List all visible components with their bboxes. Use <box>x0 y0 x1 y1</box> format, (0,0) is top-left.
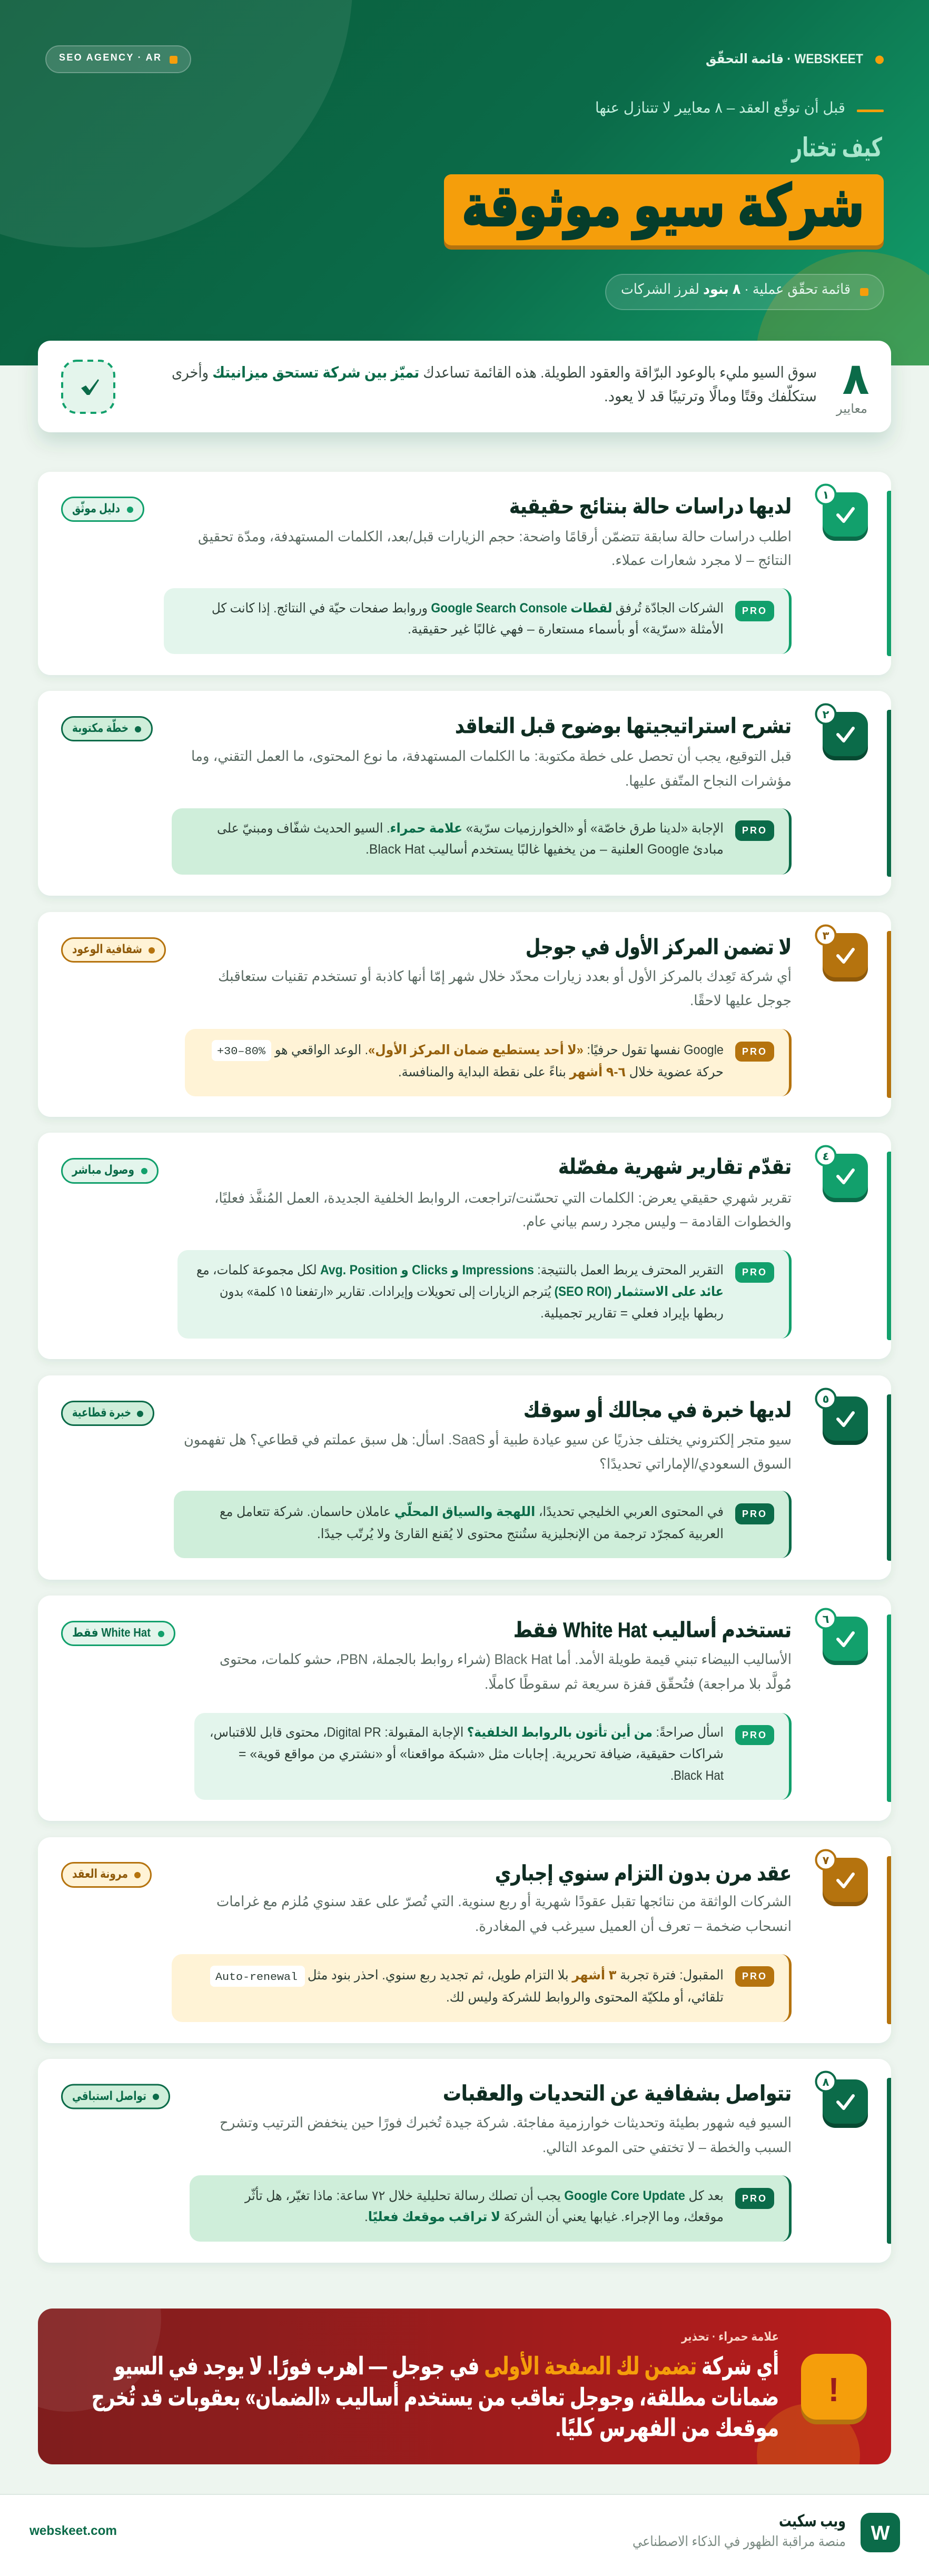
intro text: ستكلّفك وقتًا ومالًا وترتيبًا قد لا يعود. <box>604 385 817 405</box>
icon: check 1 <box>816 484 868 541</box>
warning banner <box>38 2309 891 2464</box>
callout: العربية كمجرّد ترجمة من الإنجليزية ستُنتج محتوى لا يُقنع القارئ ولا يُرتّب جيدًا. <box>317 1527 724 1542</box>
tag pill: تواصل استباقي <box>72 2089 146 2103</box>
icon: check 6: ٦ <box>823 1613 829 1626</box>
heading: تقدّم تقارير شهرية مفصّلة <box>558 1155 792 1179</box>
tag pill <box>62 1863 151 1887</box>
body text: قبل التوقيع، يجب أن تحصل على خطة مكتوبة: ما الكلمات المستهدفة، ما نوع المحتوى، ما العمل التقني، وما <box>191 746 792 765</box>
panel: criterion 8 <box>38 2059 891 2263</box>
body text: سيو متجر إلكتروني يختلف جذريًا عن سيو عيادة طبية أو SaaS. اسأل: هل سبق عملتم في قطاعي؟ هل تفهمون <box>184 1429 792 1448</box>
panel: criterion 2 <box>38 691 891 896</box>
icon: check 8: ٨ <box>823 2076 829 2088</box>
body text: والخطوات القادمة – وليس مجرد رسم بياني عام. <box>522 1214 792 1230</box>
heading line: كيف تختار <box>790 133 883 163</box>
icon: check 5 <box>816 1389 868 1445</box>
callout: عائد على الاستثمار (SEO ROI) يُترجم الزيارات إلى تحويلات وإيرادات. تقارير «ارتفعنا ١٥ كلمة» بدون <box>220 1284 724 1300</box>
intro text: سوق السيو مليء بالوعود البرّاقة والعقود الطويلة. هذه القائمة تساعدك تميّز بين شركة تستحق ميزانيتك وأخرى <box>172 362 817 382</box>
body text <box>184 1429 792 1472</box>
agency pill <box>46 46 191 73</box>
icon: check 3 <box>816 926 868 982</box>
body text: مؤشرات النجاح المتّفق عليها. <box>625 773 792 789</box>
body text: جوجل عليها لاحقًا. <box>690 993 792 1009</box>
icon: check 2 <box>816 705 868 760</box>
tag pill: خطّة مكتوبة <box>72 719 129 735</box>
body text: اطلب دراسات حالة سابقة تتضمّن أرقامًا واضحة: حجم الزيارات قبل/بعد، الكلمات المستهدفة، ومدّة تحقيق <box>198 527 792 545</box>
icon: check 5: ٥ <box>823 1393 829 1405</box>
warning text <box>92 2350 779 2442</box>
warning text: موقعك من الفهرس كليًا. <box>556 2414 779 2442</box>
callout: PRO <box>742 1046 767 1057</box>
icon: warning: ! <box>828 2371 839 2409</box>
stat: 8 criteria <box>836 354 869 416</box>
stat: 8 criteria: معايير <box>836 402 867 416</box>
tag pill: شفافية الوعود <box>72 942 142 956</box>
callout: PRO <box>742 606 767 616</box>
tagline: قبل أن توقّع العقد – ٨ معايير لا تتنازل عنها <box>595 97 845 116</box>
callout <box>172 1954 792 2022</box>
callout: بعد كل Google Core Update يجب أن تصلك رسالة تحليلية خلال ٧٢ ساعة: ماذا تغيّر، هل تأثّر <box>244 2186 724 2203</box>
tag pill: White Hat فقط <box>72 1626 151 1639</box>
heading: تستخدم أساليب White Hat فقط <box>513 1616 792 1642</box>
callout: PRO <box>742 825 767 836</box>
panel: criterion 6 <box>38 1596 891 1821</box>
callout <box>177 1250 792 1339</box>
icon: check 3: ٣ <box>823 930 829 942</box>
brand name: ويب سكيت <box>779 2511 846 2531</box>
panel: criterion 7 <box>38 1837 891 2043</box>
tag pill <box>62 2085 170 2108</box>
eyebrow: علامة حمراء · تحذير <box>681 2330 779 2344</box>
tag pill <box>62 1622 175 1645</box>
callout: PRO <box>742 1730 767 1740</box>
callout: الإجابة «لدينا طرق خاصّة» أو «الخوارزميات سرّية» علامة حمراء. السيو الحديث شفّاف ومبنيّ على <box>217 819 724 836</box>
body text <box>214 1188 792 1230</box>
subtitle pill: قائمة تحقّق عملية · ٨ بنود لفرز الشركات <box>621 281 851 298</box>
icon: check 8 <box>816 2072 868 2128</box>
callout: الشركات الجادّة تُرفق لقطات Google Search Console وروابط صفحات حيّة في النتائج. إذا كانت كل <box>212 601 724 616</box>
icon: check 7 <box>816 1850 868 1906</box>
body text: أي شركة تَعِدك بالمركز الأول أو بعدد زيارات محدّد خلال شهر إمّا أنها كاذبة أو تستخدم تقنيات ستعاقبك <box>218 966 792 985</box>
icon: check 4: ٤ <box>823 1151 829 1163</box>
callout: تلقائي، أو ملكيّة المحتوى والروابط للشركة وليس لك. <box>446 1988 724 2005</box>
heading: لديها خبرة في مجالك أو سوقك <box>523 1396 792 1422</box>
body text: السوق السعودي/الإماراتي تحديدًا؟ <box>599 1456 792 1472</box>
callout: PRO <box>742 1509 767 1519</box>
tag pill <box>62 1158 158 1183</box>
hero header <box>0 0 929 365</box>
heading: لديها دراسات حالة بنتائج حقيقية <box>509 495 792 519</box>
callout: حركة عضوية خلال ٦-٩ أشهر بناءً على نقطة البداية والمنافسة. <box>398 1063 724 1080</box>
body text <box>216 1891 792 1935</box>
tag pill: وصول مباشر <box>72 1163 134 1177</box>
body text: تقرير شهري حقيقي يعرض: الكلمات التي تحسّنت/تراجعت، الروابط الخلفية الجديدة، العمل المُنفَّذ فعليًا، <box>214 1188 792 1206</box>
panel: criterion 5 <box>38 1375 891 1580</box>
tag pill <box>62 497 143 521</box>
icon: warning <box>801 2354 867 2424</box>
body text: مُولَّد بلا مراجعة) فتُحقّق قفزة سريعة ثم سقوطًا كاملًا. <box>485 1671 792 1692</box>
agency pill: SEO AGENCY · AR <box>59 52 161 63</box>
footer <box>0 2494 929 2576</box>
callout: PRO <box>742 2193 767 2204</box>
body text: الشركات الواثقة من نتائجها تقبل عقودًا شهرية أو ربع سنوية. التي تُصرّ على عقد سنوي مُلزم مع غرامات <box>216 1891 792 1910</box>
tag pill <box>62 717 152 740</box>
body text <box>220 1649 792 1692</box>
icon: check 2: ٢ <box>823 709 829 721</box>
tag pill: دليل موثّق <box>72 501 120 516</box>
body text <box>198 527 792 569</box>
body text: النتائج – لا مجرد شعارات عملاء. <box>611 552 792 569</box>
intro card <box>38 341 891 432</box>
callout: مبادئ Google العلنية – من يخفيها غالبًا يستخدم أساليب Black Hat. <box>365 840 724 857</box>
logo <box>861 2513 900 2552</box>
callout <box>185 1029 792 1096</box>
callout <box>172 808 792 875</box>
callout: التقرير المحترف يربط العمل بالنتيجة: Impressions و Clicks و Avg. Position لكل مجموعة كلمات، مع <box>196 1263 724 1278</box>
panel: criterion 3 <box>38 912 891 1117</box>
callout <box>194 1713 792 1800</box>
icon: check 1: ١ <box>823 489 829 501</box>
icon: check 4 <box>816 1146 868 1202</box>
panel: criterion 1 <box>38 472 891 675</box>
logo: W <box>871 2522 890 2544</box>
body text: انسحاب ضخمة – تعرف أن العميل سيرغب في المغادرة. <box>475 1916 792 1935</box>
body text <box>218 966 792 1009</box>
intro text <box>172 362 817 405</box>
eyebrow: WEBSKEET · قائمة التحقّق <box>706 51 863 67</box>
icon: dashed check <box>62 361 114 413</box>
heading: تشرح استراتيجيتها بوضوح قبل التعاقد <box>455 715 792 738</box>
callout: PRO <box>742 1267 767 1277</box>
icon: check 7: ٧ <box>823 1855 829 1867</box>
callout: PRO <box>742 1971 767 1981</box>
heading: عقد مرن بدون التزام سنوي إجباري <box>495 1862 792 1886</box>
callout <box>190 2175 792 2242</box>
tag pill <box>62 1402 154 1425</box>
warning text: أي شركة تضمن لك الصفحة الأولى في جوجل — اهرب فورًا. لا يوجد في السيو <box>114 2350 779 2380</box>
body text: الأساليب البيضاء تبني قيمة طويلة الأمد. أما Black Hat (شراء روابط بالجملة، PBN، حشو كلمات، محتوى <box>220 1649 792 1668</box>
callout: اسأل صراحةً: من أين تأتون بالروابط الخلفية؟ الإجابة المقبولة: Digital PR، محتوى قابل للاقتباس، <box>210 1722 724 1740</box>
icon: check 6 <box>816 1609 868 1665</box>
callout: Black Hat. <box>670 1768 724 1783</box>
body text <box>220 2115 792 2156</box>
callout: Auto-renewal <box>215 1971 298 1984</box>
tag pill <box>62 938 165 962</box>
heading: لا تضمن المركز الأول في جوجل <box>526 934 792 959</box>
stat: 8 criteria: ٨ <box>842 354 869 403</box>
body text: السيو فيه شهور بطيئة وتحديثات خوارزمية مفاجئة. شركة جيدة تُخبرك فورًا حين ينخفض الترتيب وتشرح <box>220 2115 792 2131</box>
callout: شراكات حقيقية، ضيافة تحريرية. إجابات مثل «شبكة مواقعنا» أو «نشتري من مواقع قوية» = <box>239 1745 724 1762</box>
callout: المقبول: فترة تجربة ٣ أشهر بلا التزام طويل، ثم تجديد ربع سنوي. احذر بنود مثل <box>308 1966 724 1983</box>
callout <box>174 1491 792 1558</box>
callout <box>164 588 792 654</box>
callout: موقعك، وما الإجراء. غيابها يعني أن الشركة لا تراقب موقعك فعليًا. <box>364 2207 724 2225</box>
heading: تتواصل بشفافية عن التحديات والعقبات <box>443 2082 792 2106</box>
brand tagline: منصة مراقبة الظهور في الذكاء الاصطناعي <box>632 2533 846 2550</box>
callout: ربطها بإيراد فعلي = تقارير تجميلية. <box>540 1306 724 1321</box>
callout: الأمثلة «سرّية» أو بأسماء مستعارة – فهي غالبًا غير حقيقية. <box>408 619 724 637</box>
subtitle pill <box>606 274 884 310</box>
body text: السبب والخطة – لا تختفي حتى الموعد التالي. <box>542 2139 792 2156</box>
callout: في المحتوى العربي الخليجي تحديدًا، اللهجة والسياق المحلّي عاملان حاسمان. شركة تتعامل مع <box>220 1502 724 1520</box>
panel: criterion 4 <box>38 1133 891 1359</box>
website: webskeet.com <box>29 2523 117 2538</box>
tag pill: خبرة قطاعية <box>72 1405 131 1420</box>
callout: Google نفسها تقول حرفيًا: «لا أحد يستطيع ضمان المركز الأول». الوعد الواقعي هو <box>274 1041 724 1058</box>
tag pill: مرونة العقد <box>72 1867 128 1881</box>
body text <box>191 746 792 789</box>
callout: +30–80% <box>217 1046 266 1058</box>
